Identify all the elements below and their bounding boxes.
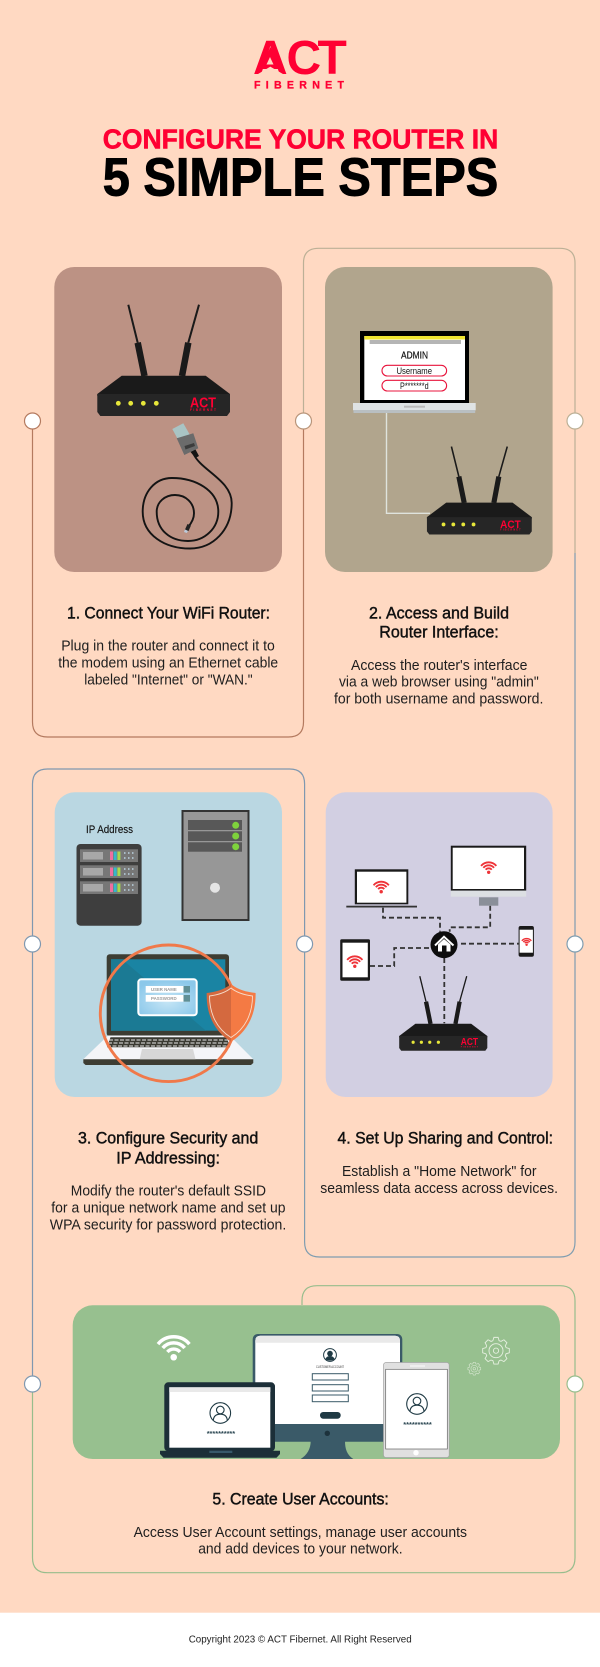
text: step 5 description: Access User Account settings, manage user accounts xyxy=(134,1525,467,1541)
icon: laptop with admin login: Username xyxy=(396,366,432,377)
icon: tablet with user sign-in: ********** xyxy=(403,1420,432,1429)
text: step 3 description: for a unique network name and set up xyxy=(51,1201,285,1217)
icon: home hub xyxy=(430,931,458,958)
connector nodes xyxy=(24,413,583,1392)
heading: step 3 xyxy=(78,1129,258,1167)
icon: ethernet cable xyxy=(143,423,232,548)
heading: step 5: 5. Create User Accounts: xyxy=(212,1489,389,1508)
footer band xyxy=(0,1613,600,1667)
text: step 4 description xyxy=(320,1164,558,1197)
icon: router: FIBERNET xyxy=(500,529,521,532)
text: step 2 description xyxy=(334,658,543,707)
icon: router: FIBERNET xyxy=(461,1047,479,1049)
icon: settings gears xyxy=(468,1337,509,1375)
icon: monitor xyxy=(451,846,526,906)
heading: step 2: Router Interface: xyxy=(379,622,499,641)
icon: laptop with login dialog: USER NAME xyxy=(151,987,177,992)
text: step 1 description xyxy=(58,639,278,688)
text: step 3 description: Modify the router's default SSID xyxy=(71,1184,266,1200)
text: step 2 description: Access the router's interface xyxy=(351,658,527,674)
text: step 3 description: WPA security for password protection. xyxy=(50,1217,286,1233)
panel: step 4 xyxy=(320,792,558,1197)
ring: orange highlight circle xyxy=(100,945,237,1082)
icon: laptop with user sign-in: ********** xyxy=(207,1429,235,1438)
label: IP Address: IP Address xyxy=(86,824,133,836)
connector frames xyxy=(32,248,575,1573)
icon: router: ACT xyxy=(190,396,216,412)
text: step 5 description: and add devices to your network. xyxy=(198,1542,403,1558)
text: step 4 description: seamless data access across devices. xyxy=(320,1181,558,1197)
icon: laptop with admin login xyxy=(353,331,476,413)
heading: step 1: 1. Connect Your WiFi Router: xyxy=(67,603,270,622)
icon: router: FIBERNET xyxy=(190,408,216,412)
wire: laptop to router xyxy=(386,413,430,513)
heading: step 2 xyxy=(369,603,509,641)
network dashed links xyxy=(370,906,519,1023)
card: step 3 background xyxy=(55,792,282,1097)
icon: router xyxy=(97,305,230,416)
text: step 3 description xyxy=(50,1184,286,1233)
heading: step 2: 2. Access and Build xyxy=(369,603,509,622)
text: step 5 description xyxy=(134,1525,467,1558)
heading: step 3: 3. Configure Security and xyxy=(78,1129,258,1148)
panel: step 5 xyxy=(73,1305,560,1558)
icon: server rack xyxy=(76,844,142,926)
icon: tower computer xyxy=(182,811,248,920)
icon: laptop with admin login: P*******d xyxy=(400,381,429,392)
text: step 1 description: Plug in the router and connect it to xyxy=(61,639,275,655)
panel: step 2 xyxy=(325,267,553,707)
panel: step 1 xyxy=(54,267,282,688)
logo: ACT Fibernet: ACT xyxy=(253,32,347,85)
card: step 4 background xyxy=(326,792,553,1097)
icon: router: ACT xyxy=(500,519,521,531)
icon: laptop xyxy=(346,869,417,908)
logo: ACT Fibernet: FIBERNET xyxy=(254,79,345,91)
footer band: Copyright 2023 © ACT Fibernet. All Right Reserved xyxy=(189,1634,412,1646)
card: step 2 background xyxy=(325,267,553,572)
icon: router xyxy=(399,976,487,1051)
icon: tablet with user sign-in xyxy=(384,1362,449,1458)
panel: step 3 xyxy=(50,792,286,1233)
icon: phone xyxy=(519,926,534,957)
icon: tablet xyxy=(340,939,370,981)
card: step 5 background xyxy=(73,1305,560,1459)
card: step 1 background xyxy=(54,267,282,572)
heading: step 4: 4. Set Up Sharing and Control: xyxy=(338,1129,553,1148)
text: step 4 description: Establish a "Home Network" for xyxy=(342,1164,537,1180)
icon: laptop with user sign-in xyxy=(160,1382,280,1458)
icon: desktop monitor with login form xyxy=(253,1334,402,1459)
icon: router: ACT xyxy=(461,1037,478,1048)
text: step 2 description: for both username and password. xyxy=(334,691,543,707)
icon: laptop with login dialog: PASSWORD xyxy=(151,996,177,1001)
title: 5 SIMPLE STEPS xyxy=(103,148,498,208)
title: CONFIGURE YOUR ROUTER IN xyxy=(103,123,498,154)
text: step 1 description: labeled "Internet" or "WAN." xyxy=(84,672,253,688)
icon: laptop with admin login: ADMIN xyxy=(401,351,428,362)
icon: router xyxy=(427,447,532,534)
text: step 2 description: via a web browser using "admin" xyxy=(339,675,539,691)
title xyxy=(103,123,498,208)
text: step 1 description: the modem using an Ethernet cable xyxy=(58,656,278,672)
icon: desktop monitor with login form: CUSTOMER ACCOUNT xyxy=(316,1365,344,1369)
icon: security shield xyxy=(207,984,256,1042)
icon: wifi xyxy=(158,1337,189,1361)
heading: step 3: IP Addressing: xyxy=(116,1148,220,1167)
icon: laptop with login dialog xyxy=(83,954,253,1065)
